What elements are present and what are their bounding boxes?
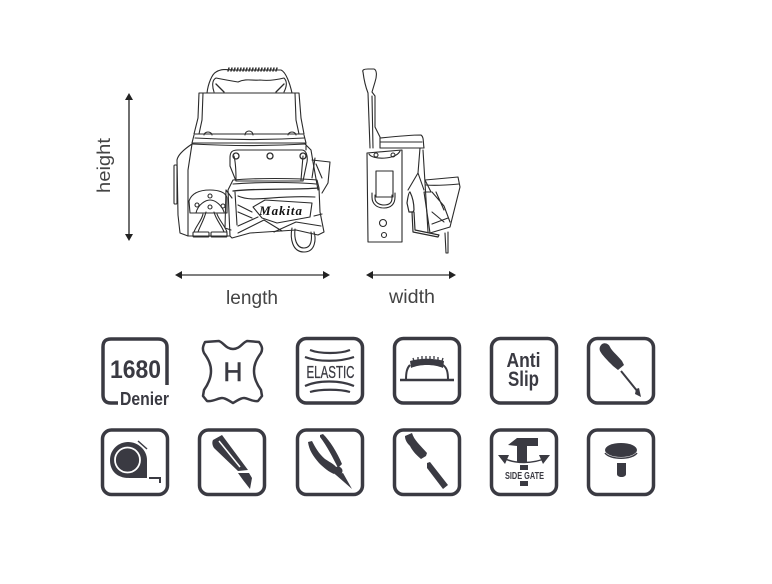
icon: side gate xyxy=(492,430,556,494)
icon: 1680 Denier: Denier xyxy=(120,389,169,409)
icon: anti slip: Anti xyxy=(506,350,540,372)
width label: width xyxy=(388,287,435,308)
icon: side gate: SIDE GATE xyxy=(505,471,544,482)
icon: padded handle xyxy=(394,338,460,403)
icon: pliers xyxy=(298,430,362,494)
icon: screwdriver xyxy=(588,338,654,403)
main body xyxy=(174,144,318,236)
icon: elastic xyxy=(298,338,362,403)
height arrow xyxy=(125,93,133,241)
front pocket xyxy=(225,178,324,238)
icon: chisel xyxy=(394,430,460,494)
icon: leather H xyxy=(203,341,262,403)
bag front view xyxy=(174,68,330,252)
rivet plate xyxy=(230,150,307,181)
icon: anti slip xyxy=(492,338,556,403)
icon: anti slip: Slip xyxy=(508,368,539,391)
logo: Makita xyxy=(258,203,303,218)
icon: 1680 Denier xyxy=(103,339,169,409)
icon: 1680 Denier: 1680 xyxy=(110,356,161,384)
width arrow xyxy=(366,271,456,279)
icon: tape measure xyxy=(102,430,168,494)
icon: elastic: ELASTIC xyxy=(306,362,354,382)
icon: utility knife xyxy=(200,430,264,494)
bag side view xyxy=(363,69,460,253)
side loop xyxy=(312,158,330,193)
waist band xyxy=(192,135,306,146)
height label: height xyxy=(94,138,114,193)
back flap xyxy=(380,135,424,148)
length label: length xyxy=(226,288,278,309)
length arrow xyxy=(175,271,330,279)
tape measure holder xyxy=(189,190,227,237)
side body xyxy=(408,148,428,232)
D ring xyxy=(291,228,315,252)
side clip xyxy=(407,192,439,237)
back plate xyxy=(367,150,402,242)
upper panel xyxy=(194,93,304,135)
side pocket xyxy=(424,177,460,253)
side handle xyxy=(363,69,380,148)
handle xyxy=(207,68,292,93)
icon: rivet button xyxy=(588,430,654,494)
icon: leather H: H xyxy=(223,357,243,387)
